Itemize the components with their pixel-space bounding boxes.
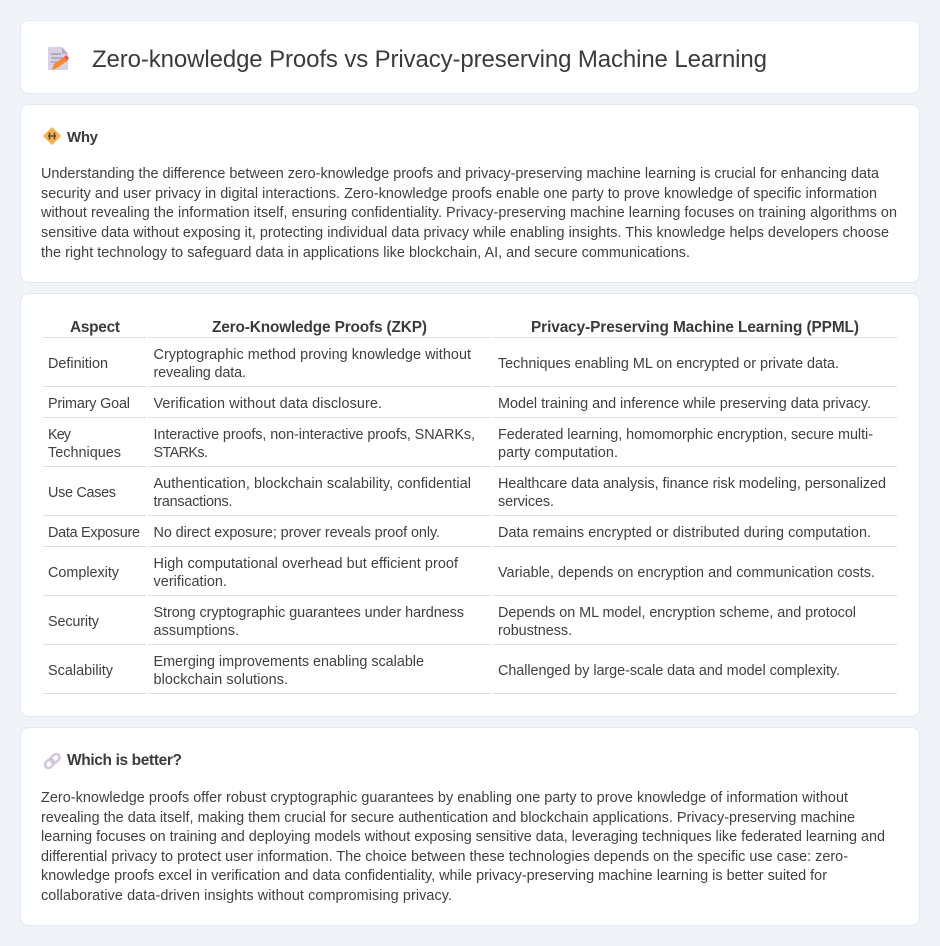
row: definition	[43, 347, 897, 386]
row: data exposure: Data Exposure	[48, 525, 140, 541]
row: data exposure	[43, 525, 897, 546]
row: definition: Cryptographic method proving knowledge without	[154, 347, 471, 363]
row: use cases	[43, 476, 897, 516]
row: primary goal: Model training and inference while preserving data privacy.	[498, 396, 871, 412]
icon: orange diamond sign	[44, 128, 60, 144]
icon: chain link	[43, 752, 61, 770]
text block: which is better paragraph: collaborative data-driven insights without compromising privacy.	[41, 888, 452, 904]
row: key techniques: Techniques	[48, 445, 121, 461]
table header row	[43, 319, 897, 338]
row: definition: revealing data.	[154, 365, 246, 381]
row: key techniques: Federated learning, homomorphic encryption, secure multi-	[498, 427, 873, 443]
panel: page header	[20, 20, 920, 94]
row: security: robustness.	[498, 623, 572, 639]
row: security: assumptions.	[154, 623, 239, 639]
text block: which is better paragraph: learning focuses on training and deploying models without exposing sensitive data, leveraging techniques like federated learning and	[41, 829, 885, 845]
heading: why: Why	[67, 129, 99, 146]
panel: comparison table	[20, 294, 920, 716]
table header row: Privacy-Preserving Machine Learning (PPML)	[531, 319, 859, 336]
row: key techniques: STARKs.	[154, 445, 208, 461]
row: complexity: High computational overhead but efficient proof	[154, 556, 459, 572]
row: data exposure: Data remains encrypted or distributed during computation.	[498, 525, 871, 541]
row: scalability: Emerging improvements enabling scalable	[154, 654, 424, 670]
text block: why paragraph: without revealing the information itself, ensuring confidentiality. Privacy-preserving machine learning focuses on training algorithms on	[40, 205, 897, 221]
row: scalability	[43, 654, 897, 694]
row: scalability: Challenged by large-scale data and model complexity.	[498, 663, 840, 679]
text block: why paragraph: sensitive data without exposing it, protecting individual data privacy while enabling insights. This knowledge helps developers choose	[41, 225, 889, 241]
panel: why	[20, 104, 920, 282]
row: key techniques: Interactive proofs, non-interactive proofs, SNARKs,	[154, 427, 475, 443]
row: complexity: Complexity	[48, 565, 120, 581]
row: security	[43, 605, 897, 644]
row: key techniques	[43, 427, 897, 466]
row: use cases: Healthcare data analysis, finance risk modeling, personalized	[498, 476, 886, 492]
row: complexity: verification.	[154, 574, 227, 590]
row: primary goal: Verification without data disclosure.	[154, 396, 382, 412]
row: security: Depends on ML model, encryption scheme, and protocol	[498, 605, 856, 621]
row: primary goal	[43, 396, 897, 418]
row: primary goal: Primary Goal	[48, 396, 130, 412]
row: data exposure: No direct exposure; prover reveals proof only.	[154, 525, 440, 541]
row: use cases: Authentication, blockchain scalability, confidential	[154, 476, 471, 492]
text block: why paragraph	[40, 166, 897, 261]
row: complexity	[43, 556, 897, 596]
row: scalability: Scalability	[48, 663, 114, 679]
row: key techniques: party computation.	[498, 445, 618, 461]
row: key techniques: Key	[48, 427, 72, 443]
row: use cases: Use Cases	[48, 485, 116, 501]
row: definition: Techniques enabling ML on encrypted or private data.	[498, 356, 839, 372]
row: security: Security	[48, 614, 100, 630]
table header row: Aspect	[70, 319, 120, 336]
text block: why paragraph: security and user privacy in digital interactions. Zero-knowledge proofs enable one party to prove knowledge of specific information	[41, 186, 877, 202]
table header row: Zero-Knowledge Proofs (ZKP)	[212, 319, 427, 336]
text block: why paragraph: the right technology to safeguard data in applications like blockchain, AI, and secure communications.	[41, 245, 690, 261]
text block: which is better paragraph: Zero-knowledge proofs offer robust cryptographic guarantees by enabling one party to prove knowledge of information without	[41, 790, 848, 806]
text block: which is better paragraph: knowledge proofs excel in verification and data confidentiality, while privacy-preserving machine learning is better suited for	[41, 868, 827, 884]
row: scalability: blockchain solutions.	[154, 672, 288, 688]
icon: document with pencil	[48, 47, 69, 70]
title: Zero-knowledge Proofs vs Privacy-preserving Machine Learning	[92, 46, 767, 73]
text block: why paragraph: Understanding the difference between zero-knowledge proofs and privacy-preserving machine learning is crucial for enhancing data	[41, 166, 879, 182]
text block: which is better paragraph: differential privacy to protect user information. The choice between these technologies depends on the specific use case: zero-	[41, 849, 848, 865]
row: use cases: services.	[498, 494, 554, 510]
row: definition: Definition	[48, 356, 108, 372]
panel: which is better	[20, 728, 920, 926]
text block: which is better paragraph	[41, 790, 885, 904]
heading: which is better: Which is better?	[67, 752, 182, 769]
text block: which is better paragraph: revealing the data itself, making them crucial for secure authentication and blockchain applications. Privacy-preserving machine	[41, 810, 855, 826]
row: security: Strong cryptographic guarantees under hardness	[154, 605, 464, 621]
row: use cases: transactions.	[154, 494, 232, 510]
row: complexity: Variable, depends on encryption and communication costs.	[498, 565, 875, 581]
